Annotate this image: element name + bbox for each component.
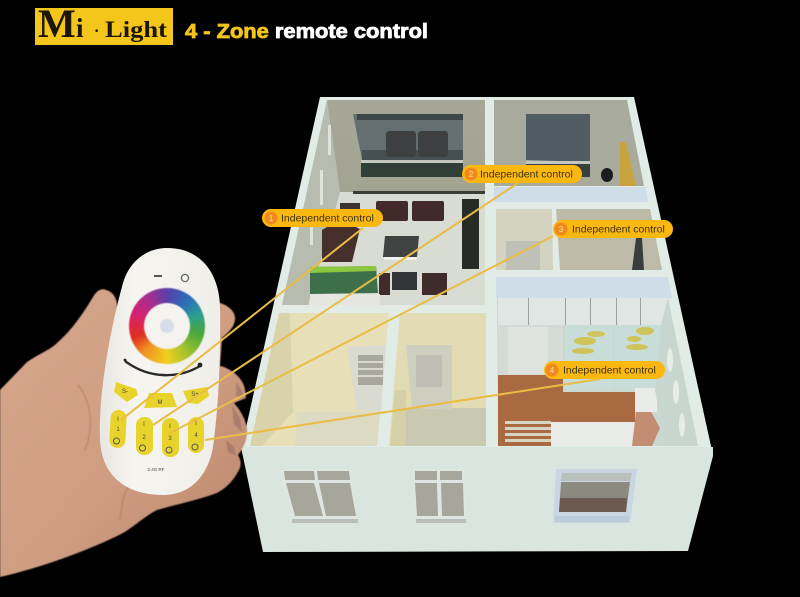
label 3: 3 [559,225,564,234]
button labels: M [158,400,162,406]
label 4 [544,361,665,379]
power icons [154,274,189,282]
remote control [100,248,220,495]
label 1 [262,209,383,227]
button labels: I [169,424,171,430]
logo badge [35,1,173,46]
slider arc [124,359,202,375]
logo badge: Light [105,17,167,42]
button labels: 2 [142,435,146,441]
room: living room [282,100,485,305]
window: front left [280,469,358,523]
button labels: I [117,417,119,423]
button labels: S+ [191,392,199,398]
label 2: Independent control [480,168,573,180]
front wall [241,447,713,552]
window: front right [553,469,637,523]
label 4: 4 [550,366,555,375]
logo badge: i [76,13,84,43]
yellow buttons [109,382,209,457]
button labels: S- [122,389,128,395]
label 3: Independent control [572,224,665,236]
door: lower middle [406,345,452,410]
button labels: I [195,421,197,427]
button labels [114,389,199,472]
room: lower middle [389,313,486,446]
label 4: Independent control [563,364,656,376]
label 3 [553,220,673,238]
button labels: 2.4G RF [147,467,165,472]
room: lower left [250,313,389,446]
label 2: 2 [469,170,474,179]
door: lower left [347,345,386,412]
room: top right [494,100,648,202]
label 1: 1 [269,214,274,223]
button labels: 3 [168,436,172,442]
logo badge: · [94,23,99,40]
title: 4 - Zone remote control [185,21,428,43]
logo badge: M [38,1,76,46]
house model [241,97,713,552]
connector lines [121,183,600,440]
room: small middle [496,209,662,270]
button labels: 1 [116,427,120,433]
colour wheel [129,288,205,364]
wheel centre [144,303,190,349]
room: master bedroom [496,277,698,446]
window: front middle [412,469,466,523]
hand [0,289,247,577]
button labels: I [143,422,145,428]
button labels: 4 [194,433,198,439]
label 2 [462,165,582,183]
house top rim [241,97,713,455]
label 1: Independent control [281,212,374,224]
